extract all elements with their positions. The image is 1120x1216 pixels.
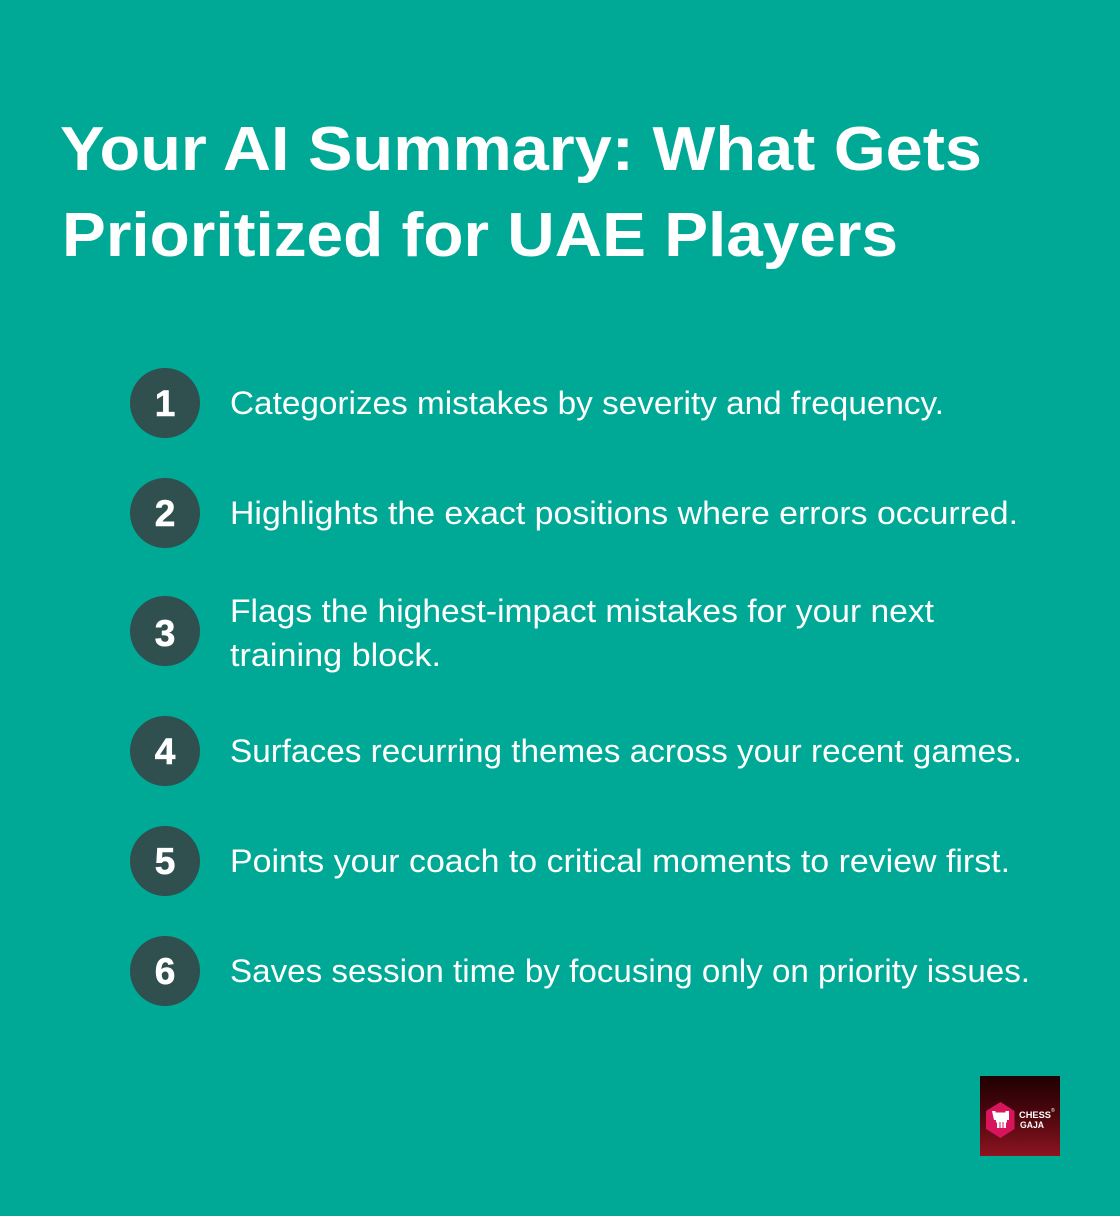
list item 5: Points your coach to critical moments to review first.: [230, 843, 1010, 879]
list item 4: 4: [155, 731, 176, 772]
list item 3: 3: [155, 613, 175, 654]
logo: Chess Gaja: CHESS: [1019, 1110, 1051, 1120]
title: [60, 115, 982, 270]
list item 3: training block.: [230, 637, 441, 673]
title: Prioritized for UAE Players: [62, 201, 898, 270]
list item 6: 6: [155, 951, 175, 992]
list item 2: [130, 478, 1018, 548]
list item 4: [130, 716, 1022, 786]
list item 1: [130, 368, 944, 438]
list item 5: 5: [155, 841, 175, 882]
logo: Chess Gaja: GAJA: [1020, 1120, 1044, 1130]
title: Your AI Summary: What Gets: [60, 115, 982, 184]
list item 3: Flags the highest-impact mistakes for your next: [230, 593, 934, 629]
logo: Chess Gaja: [980, 1076, 1060, 1156]
list item 6: Saves session time by focusing only on priority issues.: [230, 953, 1030, 989]
list item 2: 2: [155, 493, 175, 534]
list item 1: Categorizes mistakes by severity and frequency.: [230, 385, 944, 421]
list item 3: [130, 593, 934, 673]
list item 4: Surfaces recurring themes across your recent games.: [230, 733, 1022, 769]
list item 6: [130, 936, 1030, 1006]
list item 2: Highlights the exact positions where errors occurred.: [230, 495, 1018, 531]
logo: Chess Gaja: ®: [1051, 1107, 1055, 1114]
list item 5: [130, 826, 1010, 896]
list item 1: 1: [155, 383, 175, 424]
